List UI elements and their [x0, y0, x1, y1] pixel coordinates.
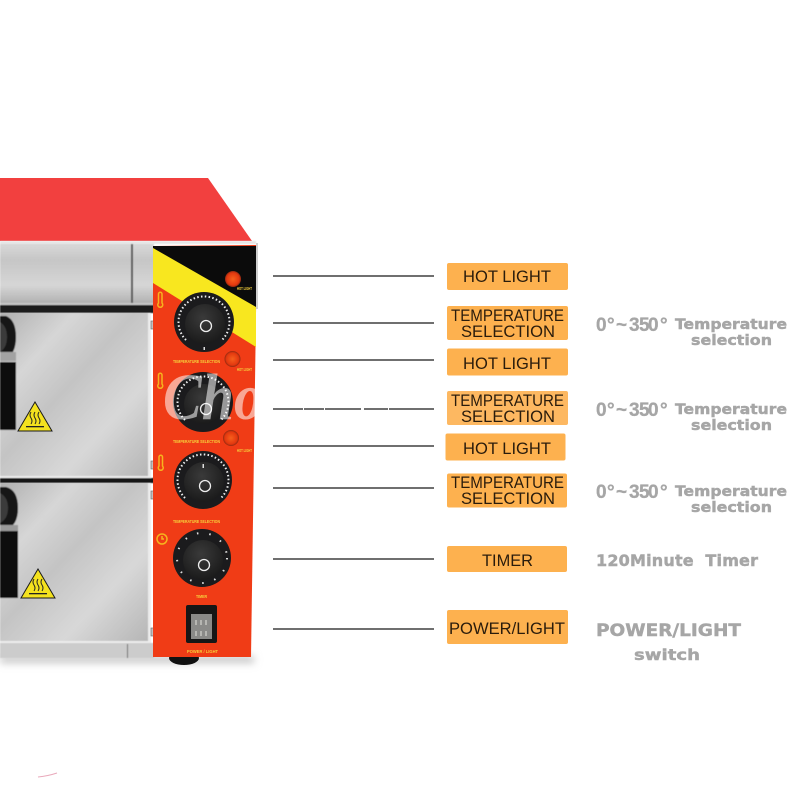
control panel: [153, 243, 258, 657]
panel captions: [173, 286, 252, 654]
label: temperature selection 2: [447, 391, 568, 426]
label: temperature selection 3: TEMPERATURE: [451, 474, 564, 492]
upper steel front: [0, 241, 256, 313]
knob 2: [173, 372, 233, 432]
description: temperature range 3: selection: [691, 500, 772, 516]
label: temperature selection 3: SELECTION: [461, 490, 555, 508]
label: power/light: [447, 610, 568, 644]
label: temperature selection 2: SELECTION: [461, 408, 555, 426]
label: timer: [447, 546, 567, 572]
lower door window: [0, 531, 18, 598]
panel captions: TEMPERATURE SELECTION: [173, 359, 220, 364]
lower door: [0, 483, 154, 658]
small pink mark: [38, 773, 57, 777]
label: hot light 3: HOT LIGHT: [463, 440, 551, 458]
panel captions: TEMPERATURE SELECTION: [173, 519, 220, 524]
leader lines: [273, 276, 434, 629]
yellow band: [153, 248, 256, 347]
watermark: Cho: [163, 361, 263, 434]
oven top: [0, 178, 252, 241]
label: temperature selection 1: TEMPERATURE: [451, 307, 564, 325]
upper door: [0, 313, 154, 483]
oven illustration: [0, 178, 787, 777]
oven shadow: [0, 656, 254, 663]
label: temperature selection 1: [447, 306, 568, 341]
description: power/light switch: [596, 621, 741, 664]
description: temperature range 3: Temperature: [675, 484, 787, 500]
description: temperature range 3: 0°~ 350°: [596, 482, 668, 503]
warning sign lower: [21, 569, 55, 598]
description: temperature range 2: [596, 400, 787, 434]
oven foot: [169, 651, 199, 665]
thermometer icons: [157, 292, 167, 544]
label: temperature selection 1: SELECTION: [461, 323, 555, 341]
description: temperature range 2: 0°~ 350°: [596, 400, 668, 421]
description: temperature range 1: selection: [691, 333, 772, 349]
warning sign upper: [18, 402, 52, 431]
description: power/light switch: switch: [634, 646, 700, 664]
lower door handle: [0, 487, 18, 529]
panel captions: POWER / LIGHT: [187, 649, 218, 654]
description: temperature range 2: Temperature: [675, 402, 787, 418]
description: temperature range 2: selection: [691, 418, 772, 434]
hot light lamps: [225, 271, 241, 287]
door hinges: [151, 321, 156, 636]
knob 1: [174, 292, 234, 352]
description: temperature range 1: Temperature: [675, 317, 787, 333]
label: temperature selection 3: [447, 474, 567, 508]
knob 3: [174, 451, 232, 509]
power switch: [186, 605, 217, 643]
description: timer: 120Minute Timer: [596, 551, 758, 570]
panel captions: TIMER: [196, 594, 207, 599]
label: timer: TIMER: [482, 552, 533, 570]
panel captions: HOT LIGHT: [237, 367, 252, 372]
panel captions: HOT LIGHT: [237, 448, 252, 453]
label: hot light 2: [447, 348, 568, 376]
label: hot light 2: HOT LIGHT: [463, 355, 551, 373]
description: temperature range 3: [596, 482, 787, 516]
description: power/light switch: POWER/LIGHT: [596, 621, 741, 641]
black corner: [153, 246, 256, 310]
label: hot light 1: HOT LIGHT: [463, 268, 551, 286]
description: temperature range 1: [596, 315, 787, 349]
knob 4 timer: [173, 529, 231, 587]
label: power/light: POWER/LIGHT: [449, 620, 565, 638]
label: temperature selection 2: TEMPERATURE: [451, 392, 564, 410]
upper door handle: [0, 316, 16, 358]
panel captions: HOT LIGHT: [237, 286, 252, 291]
label: hot light 3: [446, 434, 566, 460]
label: hot light 1: [447, 263, 568, 290]
panel captions: TEMPERATURE SELECTION: [173, 439, 220, 444]
upper door window: [0, 362, 16, 430]
description: temperature range 1: 0°~ 350°: [596, 315, 668, 336]
